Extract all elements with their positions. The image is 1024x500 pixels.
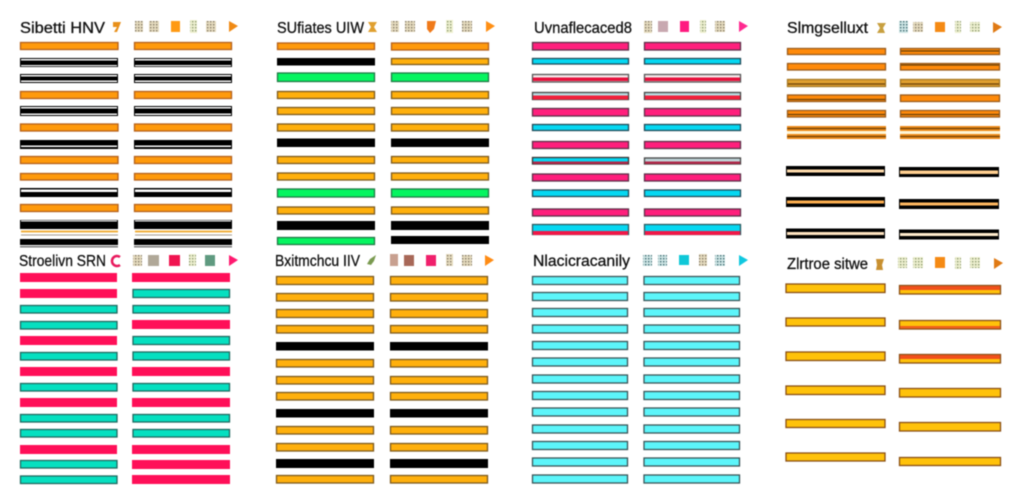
right column bars [390, 276, 488, 483]
left column bars [532, 42, 628, 235]
right column bars [132, 273, 230, 484]
left column bars [276, 276, 374, 483]
right column bars [391, 43, 489, 244]
right column bars [900, 286, 1000, 466]
right column bars [644, 42, 740, 235]
icon row [877, 21, 1002, 33]
panel: bottom row 2 [275, 253, 494, 483]
heading: Sibetti HNV [20, 20, 105, 37]
icon row [644, 20, 748, 33]
icon row [643, 254, 748, 266]
panel: top row 1 [20, 20, 238, 248]
heading: Slmgselluxt [787, 20, 869, 37]
panel: top row 4 [786, 20, 1002, 240]
panel: bottom row 1 [19, 253, 238, 484]
heading: SUfiates UIW [277, 20, 365, 37]
heading: Uvnaflecaced8 [534, 20, 632, 37]
icon row [876, 257, 1003, 270]
panel: top row 2 [277, 20, 495, 244]
heading: Bxitmchcu IIV [275, 253, 360, 270]
icon row [113, 20, 238, 33]
left column bars [532, 276, 628, 483]
left column bars [20, 273, 117, 484]
right column bars [899, 48, 1000, 240]
left column bars [20, 42, 118, 248]
heading: Stroelivn SRN [19, 253, 106, 270]
left column bars [277, 43, 375, 244]
icon row [112, 254, 238, 266]
heading: Nlacicracanily [533, 253, 630, 270]
panel: top row 3 [532, 20, 748, 235]
right column bars [134, 42, 232, 248]
heading: Zlrtroe sitwe [787, 256, 868, 273]
left column bars [786, 48, 886, 238]
panel: bottom row 4 [786, 256, 1003, 466]
icon row [367, 254, 494, 266]
right column bars [644, 276, 740, 483]
icon row [368, 20, 495, 33]
left column bars [786, 284, 885, 461]
panel: bottom row 3 [532, 253, 748, 483]
